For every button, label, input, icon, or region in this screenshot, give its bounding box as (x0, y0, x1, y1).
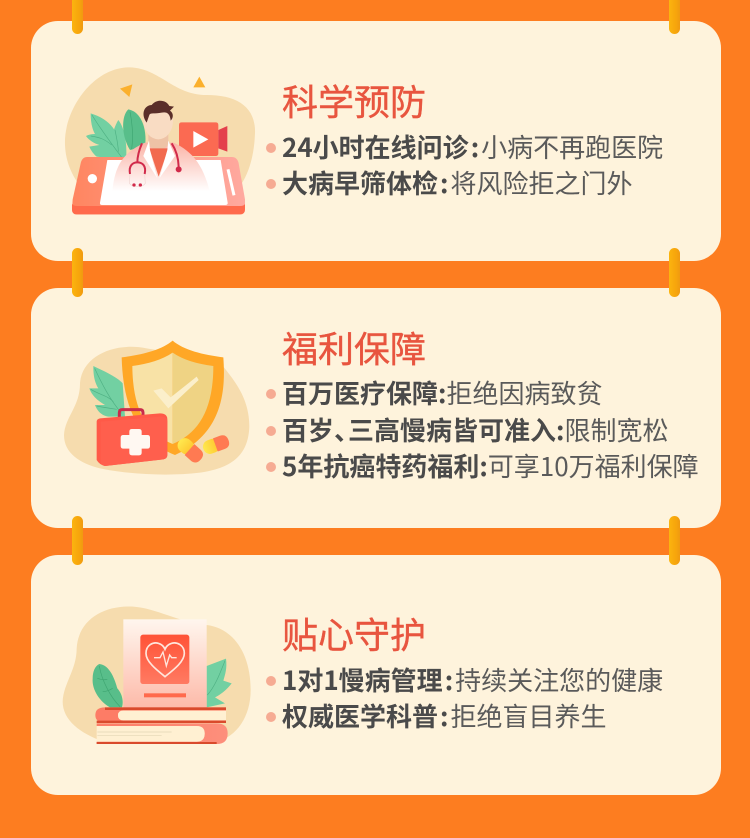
bullet list: 权威医学科普:拒绝盲目养生 (282, 697, 606, 734)
panel: 福利保障 (31, 288, 721, 528)
icon: online doctor on phone (65, 67, 255, 214)
bullet list: 5年抗癌特药福利:可享10万福利保障 (282, 447, 699, 484)
panel: 科学预防 (31, 21, 721, 261)
bullet list (266, 374, 699, 484)
icon: shield and medical kit (64, 341, 249, 475)
bullet list: 1对1慢病管理:持续关注您的健康 (282, 661, 663, 698)
bullet list (266, 128, 663, 201)
panel: 贴心守护 (31, 555, 721, 795)
binder pegs (72, 0, 680, 565)
heading: 科学预防: 科学预防 (282, 74, 426, 126)
bullet list: 百岁、三高慢病皆可准入:限制宽松 (282, 411, 668, 448)
heading: 贴心守护: 贴心守护 (282, 607, 426, 659)
bullet list (266, 661, 663, 734)
bullet list: 百万医疗保障:拒绝因病致贫 (282, 374, 602, 411)
icon: health book stack (63, 607, 251, 744)
bullet list: 24小时在线问诊:小病不再跑医院 (282, 128, 663, 165)
bullet list: 大病早筛体检:将风险拒之门外 (282, 164, 632, 201)
heading: 福利保障: 福利保障 (282, 321, 426, 373)
